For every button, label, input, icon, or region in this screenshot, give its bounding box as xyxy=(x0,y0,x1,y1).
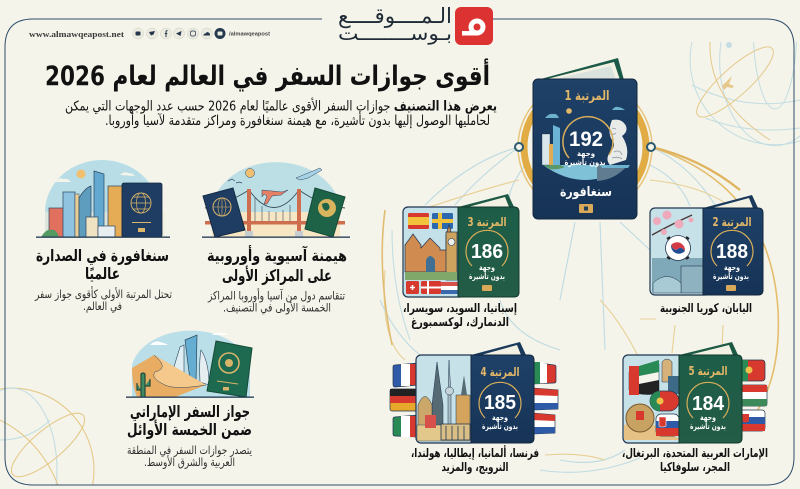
passport cover xyxy=(471,355,534,443)
logo wordmark xyxy=(338,4,452,45)
rank label: المرتبة 5 xyxy=(688,364,728,378)
description xyxy=(207,288,345,316)
visa-free count gauge: بدون تأشيرة xyxy=(690,421,726,431)
decorative connector network xyxy=(380,147,778,472)
passport cover xyxy=(679,355,742,443)
intro text: يعرض هذا التصنيف جوازات السفر الأقوى عالميًا لعام 2026 حسب عدد الوجهات التي يمكن xyxy=(65,98,497,114)
visa-free count gauge: بدون تأشيرة xyxy=(713,271,749,281)
label: rank 5 countries xyxy=(622,446,768,475)
heading: عالميًا xyxy=(85,264,120,283)
logo xyxy=(338,4,493,45)
passport cover xyxy=(533,79,637,219)
label: rank 5 countries: المجر، سلوفاكيا xyxy=(660,460,730,475)
visa-free count gauge: وجهة xyxy=(577,149,595,158)
description xyxy=(127,443,252,470)
passport inner panel xyxy=(623,355,685,443)
rank label: المرتبة 4 xyxy=(480,365,520,379)
website address: www.almawqeapost.net xyxy=(29,29,124,39)
decorative globe bottom left xyxy=(0,388,94,486)
flags right xyxy=(532,362,558,434)
passport pages xyxy=(679,342,738,355)
passport: rank 5 UAE and neighbours xyxy=(623,342,767,443)
visa-free count gauge: وجهة xyxy=(700,413,716,422)
heading xyxy=(207,245,347,285)
panel: UAE passport xyxy=(126,331,254,470)
description xyxy=(34,286,172,313)
visa-free count gauge xyxy=(563,117,613,167)
passport cover xyxy=(458,207,519,297)
heading xyxy=(127,402,252,439)
description: تحتل المرتبة الأولى كأقوى جواز سفر xyxy=(34,286,172,302)
passport: rank 1 Singapore xyxy=(533,58,637,219)
illustration: skyline and passport xyxy=(36,160,170,238)
passport inner panel xyxy=(650,208,710,295)
passport pages xyxy=(458,194,514,207)
description: في العالم. xyxy=(83,299,122,313)
visa-free count gauge: 188 xyxy=(716,241,748,263)
rank label: المرتبة 2 xyxy=(712,215,752,229)
label: rank 2 countries: اليابان، كوريا الجنوبية xyxy=(660,301,752,316)
panel: Singapore leads xyxy=(34,160,172,313)
chip icon xyxy=(726,285,736,291)
title: أقوى جوازات السفر في العالم لعام 2026 xyxy=(45,58,490,92)
visa-free count gauge: وجهة xyxy=(479,263,495,272)
visa-free count gauge: وجهة xyxy=(492,413,508,422)
rank 1 ring with nodes xyxy=(515,80,655,214)
passport: rank 3 Spain and neighbours xyxy=(403,194,519,297)
illustration: desert towers and passport xyxy=(126,331,254,398)
passport pages xyxy=(537,58,624,80)
label: rank 4 countries xyxy=(411,445,539,475)
chip icon xyxy=(482,285,492,291)
passport pages xyxy=(703,195,758,208)
passport: rank 4 France and neighbours xyxy=(390,342,558,443)
label: rank 3 countries: الدنمارك، لوكسمبورغ xyxy=(411,315,509,330)
rank label: المرتبة 1 xyxy=(564,89,610,104)
label: rank 4 countries: فرنسا، ألمانيا، إيطاليا، هولندا، xyxy=(411,445,539,461)
heading: هيمنة آسيوية وأوروبية xyxy=(207,245,347,265)
visa-free count gauge: بدون تأشيرة xyxy=(482,421,518,431)
logo mark xyxy=(455,7,493,45)
passport inner panel xyxy=(403,207,465,297)
heading xyxy=(36,246,169,283)
illustration: bridge planes and passports xyxy=(202,162,350,238)
intro text xyxy=(65,98,497,129)
visa-free count gauge: 185 xyxy=(484,392,516,414)
passport inner panel xyxy=(416,355,476,443)
rank label: المرتبة 3 xyxy=(468,215,506,229)
logo wordmark: بـوســــــــت xyxy=(338,23,452,45)
label: rank 4 countries: النرويج، والمزيد xyxy=(442,460,508,475)
logo wordmark: الـمــــوقــــع xyxy=(338,4,452,28)
heading: سنغافورة في الصدارة xyxy=(36,246,169,266)
panel: Asian and European dominance xyxy=(202,162,350,316)
visa-free count gauge: بدون تأشيرة xyxy=(564,157,606,167)
description: تتقاسم دول من آسيا وأوروبا المراكز xyxy=(207,288,345,304)
social media icons xyxy=(132,28,226,39)
description: العربية والشرق الأوسط. xyxy=(144,455,235,470)
visa-free count gauge: وجهة xyxy=(724,263,740,272)
description: الخمسة الأولى في التصنيف. xyxy=(223,300,331,316)
illustration: Singapore skyline and merlion xyxy=(542,107,630,181)
visa-free count gauge xyxy=(687,382,729,431)
passport pages xyxy=(471,342,526,355)
visa-free count gauge xyxy=(479,382,521,431)
flags right xyxy=(738,360,767,431)
decorative globe top right xyxy=(688,38,800,146)
heading: على المراكز الأولى xyxy=(222,266,332,285)
visa-free count gauge: 184 xyxy=(692,393,725,415)
heading: جواز السفر الإماراتي xyxy=(130,402,250,422)
heading: ضمن الخمسة الأوائل xyxy=(127,420,252,439)
label: rank 3 countries: إسبانيا، السويد، سويسرا، xyxy=(403,301,517,316)
description: يتصدر جوازات السفر في المنطقة xyxy=(127,443,252,458)
visa-free count gauge xyxy=(711,230,753,281)
visa-free count gauge: 192 xyxy=(569,128,603,151)
visa-free count gauge xyxy=(466,230,508,281)
passport: rank 2 Japan and South Korea xyxy=(650,195,763,295)
chip icon xyxy=(579,204,593,213)
passport cover xyxy=(703,208,763,295)
social handle: /almawqeapost xyxy=(229,32,270,38)
intro text: لحامليها الوصول إليها بدون تأشيرة، مع هيمنة سنغافورة ومراكز متقدمة لآسيا وأوروبا. xyxy=(105,111,490,129)
visa-free count gauge: بدون تأشيرة xyxy=(469,271,505,281)
visa-free count gauge: 186 xyxy=(471,241,503,263)
flags left xyxy=(390,363,418,437)
country name: سنغافورة xyxy=(560,185,612,200)
label: rank 3 countries xyxy=(403,301,517,330)
